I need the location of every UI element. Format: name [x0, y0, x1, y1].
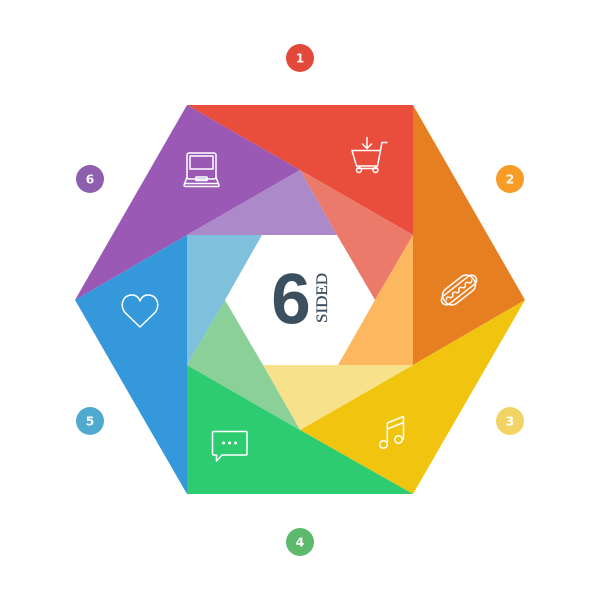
icon: heart [122, 295, 158, 327]
icon: laptop [184, 153, 219, 186]
number badge 6: 6 [86, 172, 95, 186]
number badge 2 [496, 165, 524, 193]
number badge 3 [496, 407, 524, 435]
segment 4: green [187, 300, 413, 494]
icon: speech bubble [212, 432, 247, 461]
segment 3: yellow [263, 300, 525, 494]
number badge 5: 5 [86, 414, 94, 428]
icon: hot dog [437, 270, 481, 310]
number badge 2: 2 [506, 172, 514, 186]
icon: shopping cart [352, 138, 387, 172]
icon: music note [380, 416, 404, 448]
segment 1: red [187, 105, 413, 300]
panel: hexagon diagram [75, 105, 525, 494]
number badge 4 [286, 528, 314, 556]
center label: SIDED [314, 273, 331, 323]
number badge 1 [286, 44, 314, 72]
number badge 4: 4 [296, 534, 305, 550]
number badge 1: 1 [296, 50, 304, 66]
center label [271, 260, 331, 340]
number badge 3: 3 [506, 414, 514, 428]
segment 2: orange [338, 105, 525, 365]
segment 6: purple [75, 105, 337, 300]
center label: 6 [271, 260, 311, 340]
number badge 6 [76, 165, 104, 193]
segment 5: blue [75, 235, 262, 494]
number badge 5 [76, 407, 104, 435]
